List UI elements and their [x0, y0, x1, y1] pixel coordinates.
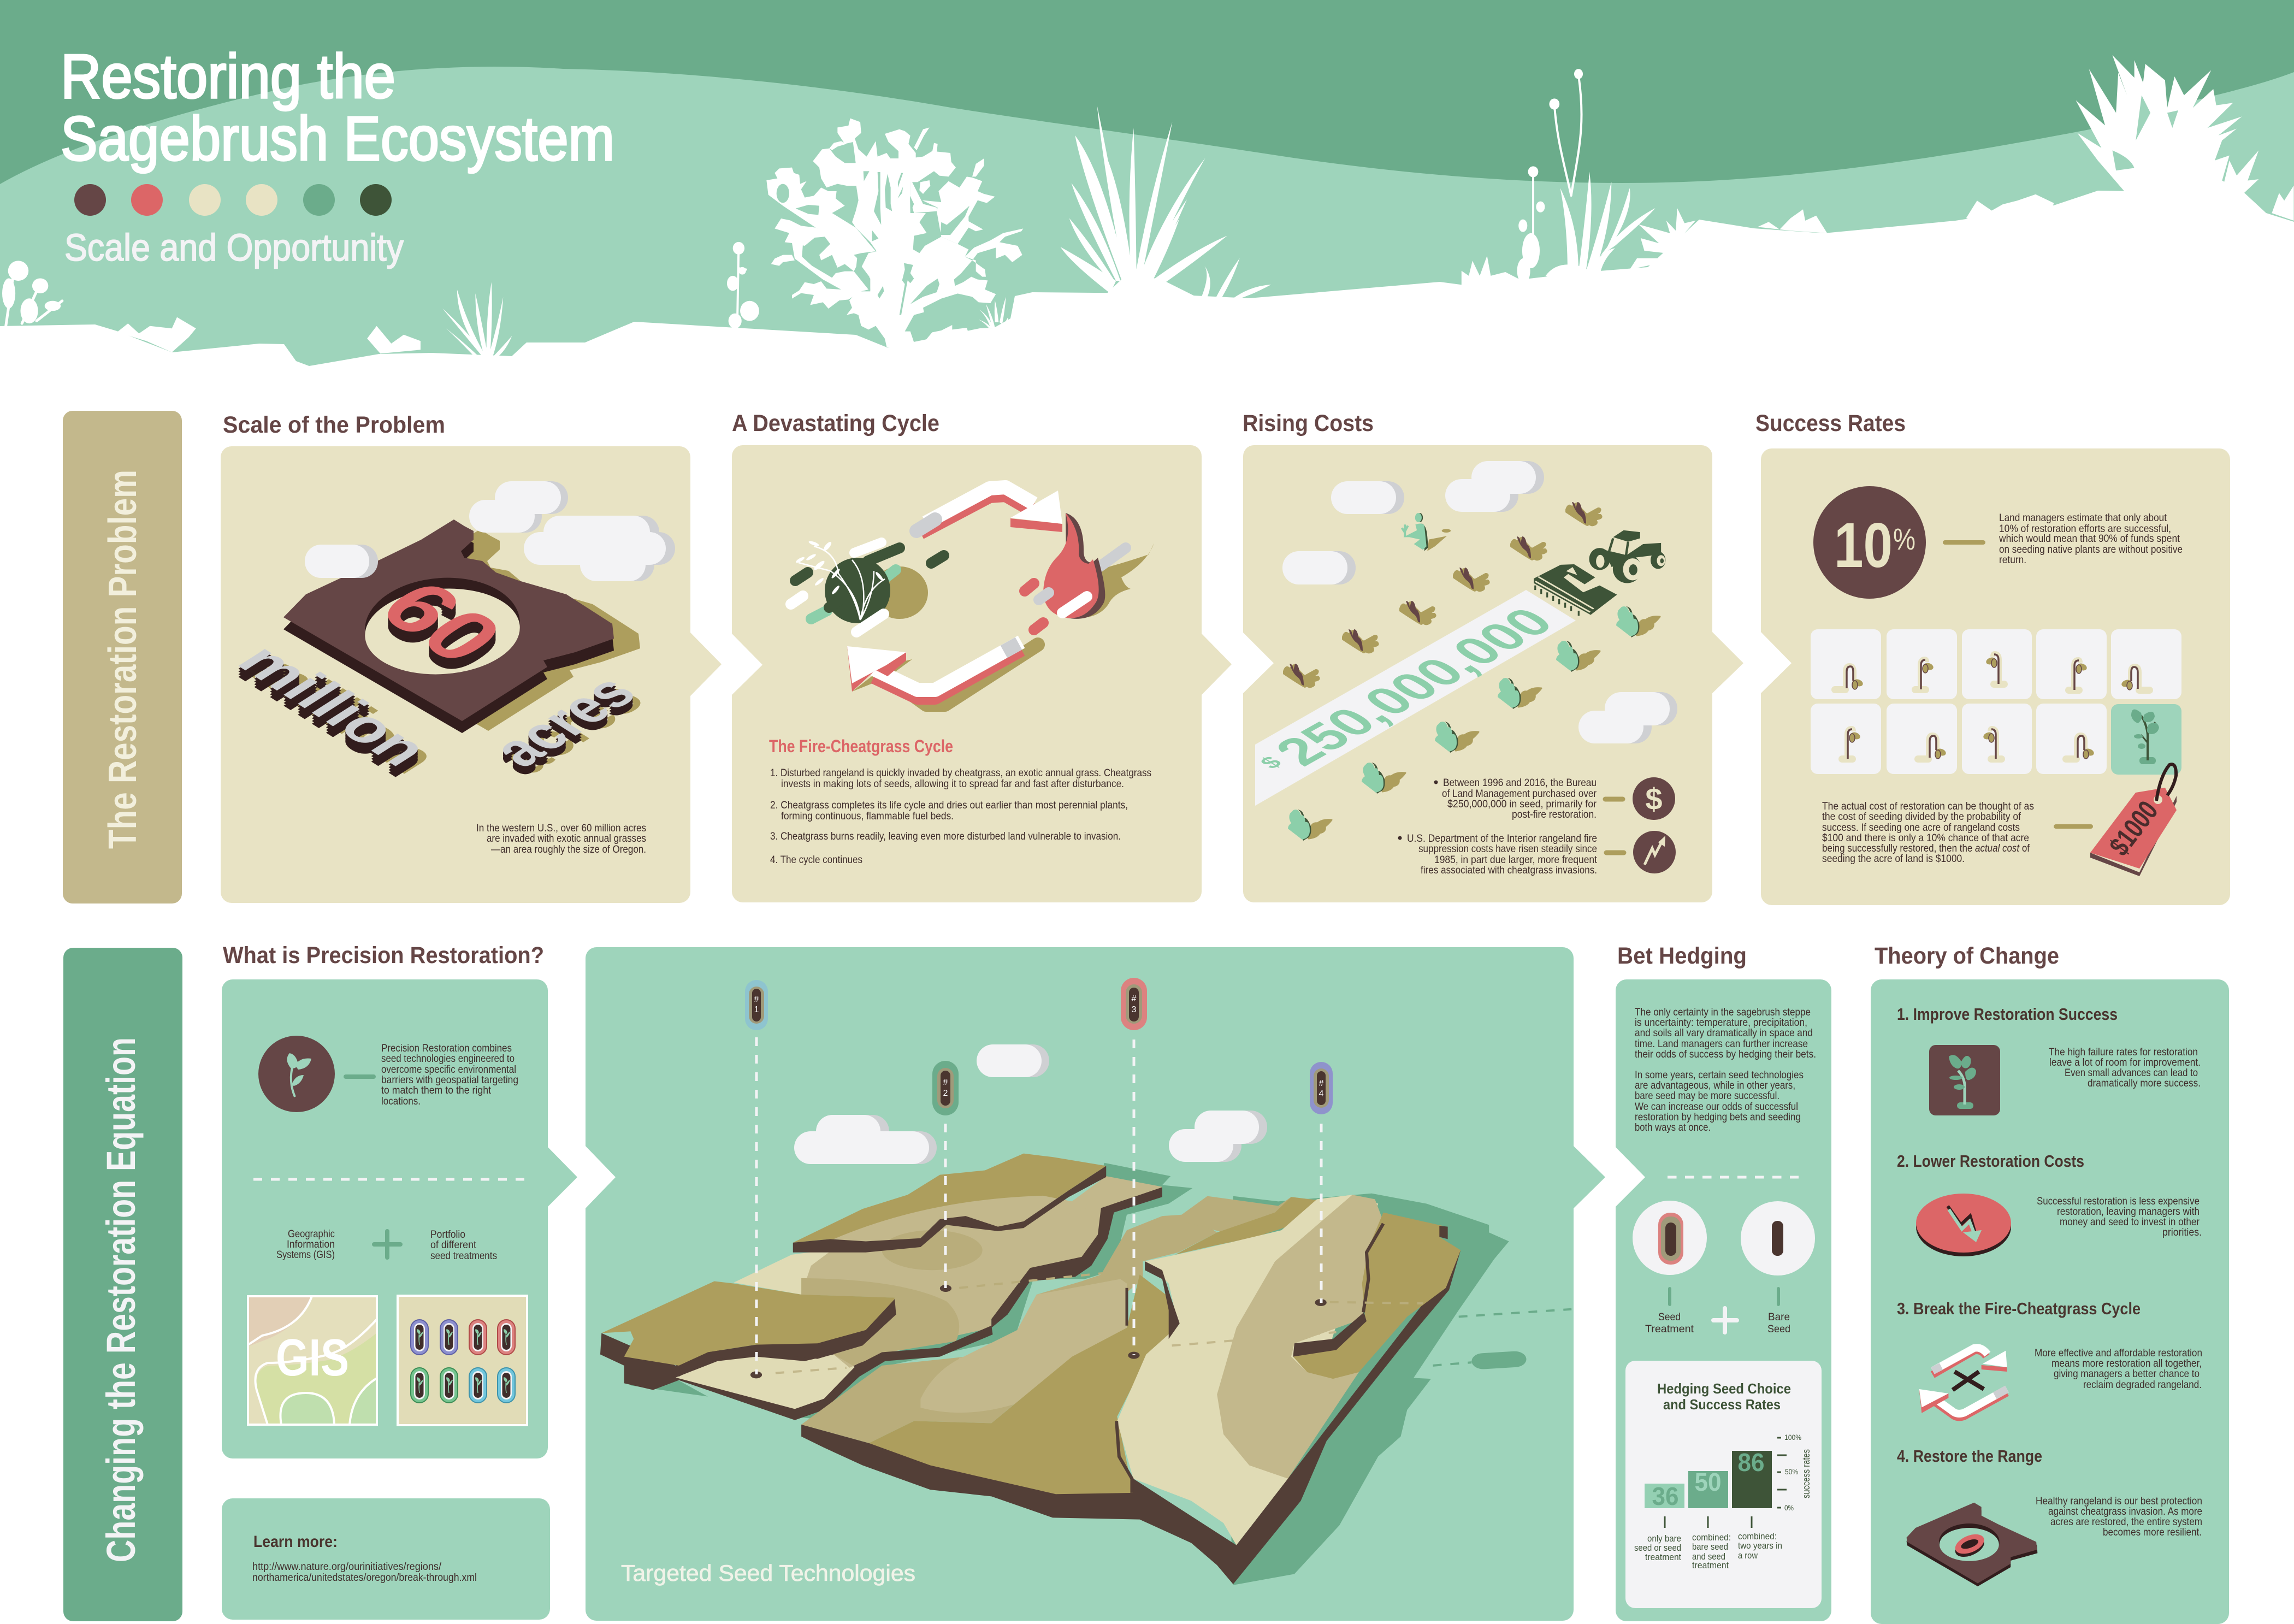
pin 4	[1310, 1062, 1333, 1114]
cost notes: fires associated with cheatgrass invasions.	[1421, 864, 1597, 876]
acres text: acres	[477, 674, 650, 784]
text: The high failure rates for restoration	[2049, 1046, 2198, 1058]
icon: price tag	[2056, 764, 2177, 876]
seed labels: Bare	[1768, 1311, 1790, 1323]
url: http://www.nature.org/ourinitiatives/regions/	[252, 1561, 442, 1573]
pin dashes	[756, 1037, 1321, 1374]
text: definition: Precision Restoration combines	[381, 1042, 512, 1054]
text: hedging explanation: both ways at once.	[1635, 1121, 1711, 1133]
icon: rising arrow circle	[1606, 831, 1676, 873]
gis map	[248, 1296, 377, 1425]
heading: Bet Hedging	[1617, 943, 1747, 969]
text: actual cost: seeding the acre of land is $1000.	[1822, 853, 1965, 865]
text: gis label	[276, 1228, 335, 1261]
million text: million	[224, 637, 444, 778]
title: Restoring the	[61, 42, 395, 111]
cycle steps: 1. Disturbed rangeland is quickly invaded by cheatgrass, an exotic annual grass. Cheatgrass	[770, 767, 1151, 779]
icon: dollar circle: $	[1645, 782, 1663, 816]
text: hedging explanation: restoration by hedging bets and seeding	[1635, 1111, 1801, 1123]
icon: plus	[374, 1231, 400, 1257]
text: portfolio label	[430, 1229, 497, 1262]
text: restoration, leaving managers with	[2057, 1206, 2200, 1218]
text: definition: barriers with geospatial targeting	[381, 1074, 518, 1086]
text: hedging explanation: The only certainty in the sagebrush steppe	[1635, 1006, 1811, 1018]
text: portfolio label: seed treatments	[430, 1250, 497, 1262]
bar chart: 50%	[1785, 1467, 1798, 1476]
caption: are invaded with exotic annual grasses	[487, 832, 646, 845]
step 1: 1. Improve Restoration Success	[1897, 1005, 2118, 1024]
icon: tractor and seeder	[1534, 530, 1665, 616]
bar chart: success rates	[1801, 1449, 1812, 1498]
bar chart: 50	[1694, 1468, 1722, 1496]
cycle arrow: bottom	[847, 642, 1038, 705]
panel: success rates	[1755, 410, 2230, 905]
text: definition: overcome specific environmental	[381, 1064, 516, 1076]
acres text: acres	[477, 666, 650, 776]
pin 1: #	[754, 995, 759, 1004]
text: hedging explanation: bare seed may be more successful.	[1635, 1090, 1779, 1102]
oregon map with 60: 60	[359, 578, 524, 688]
dollar banner: 250,000,000	[1262, 600, 1566, 773]
text: actual cost: The actual cost of restoration can be thought of as	[1822, 800, 2034, 812]
pin 2	[932, 1061, 959, 1115]
title: Sagebrush Ecosystem	[61, 104, 614, 174]
clouds	[305, 481, 675, 581]
cost notes: Between 1996 and 2016, the Bureau	[1443, 777, 1597, 789]
icon: person planting	[1402, 513, 1451, 551]
text: giving managers a better chance to	[2054, 1368, 2200, 1380]
url: northamerica/unitedstates/oregon/break-through.xml	[252, 1572, 477, 1584]
cost notes: $250,000,000 in seed, primarily for	[1447, 798, 1597, 810]
text: portfolio label: of different	[430, 1239, 477, 1251]
text: hedging explanation: and soils all vary dramatically in space and	[1635, 1027, 1813, 1039]
text: gis label: Information	[287, 1238, 335, 1250]
million text: million	[224, 646, 444, 786]
text: means more restoration all together,	[2051, 1357, 2202, 1369]
caption	[476, 822, 646, 855]
text: hedging explanation: is uncertainty: temperature, precipitation,	[1635, 1017, 1807, 1029]
chart labels: combined:	[1738, 1531, 1777, 1542]
big sagebrush silhouette	[766, 119, 1023, 347]
cycle steps: 3. Cheatgrass burns readily, leaving even more disturbed land vulnerable to invasion.	[770, 830, 1121, 842]
text: definition: seed technologies engineered to	[381, 1053, 515, 1065]
dead shrubs	[1284, 502, 1601, 687]
clouds	[794, 1044, 1267, 1164]
text: definition	[381, 1042, 518, 1107]
heading: Success Rates	[1755, 410, 1906, 436]
oregon map with 60: 60	[359, 572, 524, 683]
text: becomes more resilient.	[2103, 1526, 2202, 1538]
pin 4: 4	[1319, 1089, 1324, 1099]
chart labels: and seed	[1692, 1551, 1725, 1562]
cycle steps: invests in making lots of seeds, allowing it to spread far and fast after disturbance.	[781, 778, 1124, 790]
bar chart: 0%	[1784, 1503, 1794, 1512]
heading: What is Precision Restoration?	[223, 942, 544, 969]
oregon map with 60: 60	[359, 567, 524, 677]
text: success estimate: on seeding native plants are without positive	[1999, 544, 2183, 556]
panel background	[732, 445, 1232, 902]
caption: —an area roughly the size of Oregon.	[491, 843, 646, 855]
step 3: 3. Break the Fire-Cheatgrass Cycle	[1897, 1299, 2141, 1318]
text: leave a lot of room for improvement.	[2049, 1056, 2201, 1068]
bar chart: 86	[1738, 1448, 1764, 1477]
panel: a devastating cycle	[732, 410, 1232, 902]
text: hedging explanation: time. Land managers can further increase	[1635, 1038, 1808, 1050]
panel background	[222, 979, 577, 1458]
pin 2: 2	[943, 1089, 948, 1098]
text: success estimate	[1999, 512, 2183, 566]
heading: Rising Costs	[1243, 410, 1374, 436]
panel: learn more	[222, 1498, 550, 1620]
step 4	[1897, 1446, 2202, 1586]
text: gis label: Geographic	[288, 1228, 335, 1240]
icon: plus	[1713, 1308, 1737, 1332]
text: Healthy rangeland is our best protection	[2036, 1495, 2202, 1507]
panel: rising costs	[1243, 410, 1743, 902]
seed labels: Treatment	[1645, 1323, 1694, 1335]
icon: broken cycle	[1919, 1348, 2007, 1417]
ten percent circle	[1813, 486, 1983, 599]
header plants: right half	[1462, 55, 2294, 286]
pin 1: 1	[754, 1005, 759, 1014]
caption: In the western U.S., over 60 million acres	[476, 822, 646, 834]
text	[2036, 1495, 2202, 1538]
gis map: GIS	[276, 1328, 349, 1387]
icon: seedling tile	[1929, 1045, 2000, 1115]
learn more heading: Learn more:	[253, 1533, 338, 1551]
cost notes: suppression costs have risen steadily since	[1418, 843, 1597, 855]
chart labels: only bare	[1647, 1533, 1681, 1544]
pin 1	[745, 980, 768, 1030]
icon: price tag: $1000	[2103, 795, 2165, 861]
panel: scale of the problem	[221, 412, 722, 903]
text: against cheatgrass invasion. As more	[2048, 1505, 2202, 1517]
map caption: Targeted Seed Technologies	[621, 1560, 915, 1586]
cost notes: post-fire restoration.	[1512, 808, 1597, 820]
chart labels: treatment	[1645, 1552, 1681, 1562]
section bar: changing the restoration equation	[63, 948, 182, 1621]
step 3	[1897, 1299, 2202, 1417]
chart labels: a row	[1738, 1550, 1758, 1561]
seedling grid	[1811, 629, 2181, 775]
step 4: 4. Restore the Range	[1897, 1446, 2042, 1466]
chart labels	[1634, 1531, 1782, 1570]
text: More effective and affordable restoration	[2035, 1347, 2202, 1359]
cost notes: U.S. Department of the Interior rangeland fire	[1407, 832, 1597, 845]
acres text: acres	[477, 671, 650, 782]
million text: million	[224, 640, 444, 781]
text: actual cost	[1822, 800, 2034, 865]
icon: healthy seedling	[2131, 710, 2159, 764]
step 2: 2. Lower Restoration Costs	[1897, 1151, 2084, 1171]
heading: A Devastating Cycle	[732, 410, 939, 436]
ten percent circle: %	[1893, 522, 1915, 556]
icon: sprout circle	[258, 1036, 374, 1112]
cycle steps: forming continuous, flammable fuel beds.	[781, 810, 954, 822]
seed treatment portfolio	[398, 1296, 527, 1425]
icon: flame	[1025, 513, 1154, 630]
text: definition: to match them to the right	[381, 1084, 492, 1096]
cycle steps	[770, 767, 1151, 866]
text: portfolio label: Portfolio	[430, 1229, 465, 1241]
cost notes: 1985, in part due larger, more frequent	[1434, 854, 1598, 866]
dollar banner: $	[1254, 753, 1287, 772]
panel: theory of change	[1871, 943, 2229, 1624]
icon: cheatgrass disc	[791, 540, 944, 632]
chart title	[1657, 1380, 1791, 1413]
oregon map with 60: 60	[359, 575, 524, 686]
chart labels: combined:	[1692, 1532, 1731, 1543]
acres text: acres	[477, 669, 650, 779]
icon: restored oregon	[1907, 1503, 2037, 1586]
text: success estimate: return.	[1999, 554, 2026, 566]
panel background	[1761, 448, 2230, 905]
text: money and seed to invest in other	[2060, 1216, 2200, 1228]
text	[2035, 1347, 2202, 1391]
cycle arrow: top	[917, 487, 1062, 533]
text: acres are restored, the entire system	[2050, 1516, 2202, 1528]
million text: million	[224, 635, 444, 775]
chart labels: seed or seed	[1634, 1543, 1681, 1553]
text: hedging explanation: are advantageous, while in other years,	[1635, 1079, 1795, 1091]
text: actual cost: being successfully restored, then the actual cost of	[1822, 842, 2030, 854]
cost notes	[1398, 777, 1598, 876]
acres text: acres	[484, 672, 658, 783]
pin 3: #	[1132, 994, 1137, 1003]
url	[252, 1561, 477, 1584]
panel: targeted seed technologies map	[586, 947, 1605, 1621]
bar chart	[1645, 1433, 1812, 1528]
cycle heading: The Fire-Cheatgrass Cycle	[769, 736, 953, 756]
text: Successful restoration is less expensive	[2037, 1195, 2200, 1207]
pin 4: #	[1319, 1079, 1324, 1088]
text: success estimate: 10% of restoration efforts are successful,	[1999, 523, 2171, 535]
text: Even small advances can lead to	[2065, 1067, 2198, 1079]
seed labels	[1645, 1289, 1790, 1335]
heading: Theory of Change	[1875, 943, 2059, 969]
panel background	[221, 446, 722, 903]
subtitle: Scale and Opportunity	[64, 226, 404, 269]
text: definition: locations.	[381, 1095, 421, 1107]
clouds	[1282, 461, 1677, 743]
cycle steps: 2. Cheatgrass completes its life cycle and dries out earlier than most perennial plants,	[770, 799, 1128, 811]
section bar: the restoration problem	[63, 411, 182, 903]
panel background	[1616, 979, 1831, 1621]
step 1	[1897, 1005, 2201, 1115]
text: hedging explanation: their odds of success by hedging their bets.	[1635, 1048, 1816, 1060]
oregon map with 60	[283, 519, 640, 733]
text: hedging explanation: We can increase our odds of successful	[1635, 1101, 1798, 1113]
text: dramatically more success.	[2088, 1077, 2201, 1089]
pin 3	[1121, 978, 1147, 1030]
title	[61, 42, 614, 174]
oregon map with 60: 60	[359, 570, 524, 680]
text: gis label: Systems (GIS)	[276, 1249, 335, 1261]
text: priorities.	[2162, 1226, 2202, 1238]
restored bushes	[1288, 606, 1660, 841]
chart labels: bare seed	[1692, 1542, 1728, 1552]
panel background	[1243, 445, 1743, 902]
bar chart: 36	[1652, 1482, 1679, 1510]
panel: bet hedging	[1616, 943, 1831, 1621]
panel: what is precision restoration	[222, 942, 577, 1458]
text: hedging explanation: In some years, certain seed technologies	[1635, 1069, 1804, 1081]
header landscape	[0, 0, 2294, 426]
pin 2: #	[943, 1078, 948, 1087]
icon: treated seed	[1633, 1201, 1707, 1275]
text: actual cost: $100 and there is only a 10% chance of that acre	[1822, 832, 2029, 844]
seed labels: Seed	[1767, 1323, 1790, 1335]
text	[2037, 1195, 2202, 1238]
panel background	[1871, 979, 2229, 1624]
step 2	[1897, 1151, 2202, 1256]
header plants: shrubs and grasses, left half	[2, 105, 1271, 356]
chart title: Hedging Seed Choice	[1657, 1380, 1791, 1397]
cycle steps: 4. The cycle continues	[770, 854, 862, 866]
million text: million	[224, 643, 444, 783]
bar chart: 100%	[1784, 1433, 1801, 1442]
heading: Scale of the Problem	[223, 412, 445, 438]
text: success estimate: which would mean that 90% of funds spent	[1999, 533, 2180, 545]
chart labels: treatment	[1692, 1560, 1729, 1570]
text: actual cost: the cost of seeding divided by the probability of	[1822, 811, 2021, 823]
cost notes: of Land Management purchased over	[1442, 788, 1597, 800]
panel background	[586, 947, 1605, 1621]
isometric landscape	[600, 1154, 1571, 1585]
million text: million	[233, 642, 453, 783]
chart card	[1625, 1361, 1822, 1608]
section bar: changing the restoration equation: Changing the Restoration Equation	[98, 1037, 144, 1562]
pin 3: 3	[1132, 1005, 1137, 1014]
section bar: the restoration problem: The Restoration Problem	[101, 470, 145, 849]
seed labels: Seed	[1658, 1311, 1681, 1323]
icon: bare seed	[1741, 1201, 1815, 1275]
icon: dollar circle	[1605, 777, 1675, 820]
text: hedging explanation	[1635, 1006, 1816, 1133]
text: reclaim degraded rangeland.	[2083, 1379, 2202, 1391]
ten percent circle: 10	[1834, 510, 1893, 581]
chart labels: two years in	[1738, 1540, 1782, 1551]
palette dots	[74, 184, 392, 216]
text: success estimate: Land managers estimate that only about	[1999, 512, 2167, 524]
text	[2049, 1046, 2201, 1089]
chart title: and Success Rates	[1663, 1396, 1781, 1413]
icon: red falling-cost disc	[1916, 1194, 2011, 1256]
text: actual cost: success. If seeding one acre of rangeland costs	[1822, 822, 2020, 834]
